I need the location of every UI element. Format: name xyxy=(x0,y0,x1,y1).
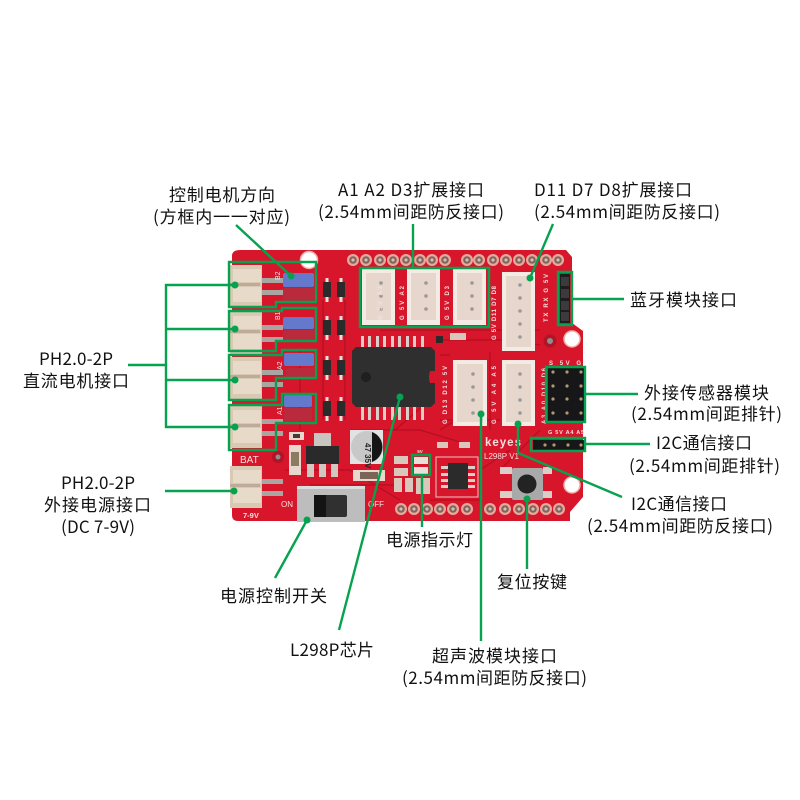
label: power connector: PH2.0-2P xyxy=(61,469,135,494)
board silk text: G 5V A4 A5 xyxy=(548,430,584,436)
bottom pin pads xyxy=(395,503,565,515)
I2C connector leader xyxy=(518,424,622,497)
motor bracket xyxy=(128,285,235,427)
label: bluetooth: 蓝牙模块接口 xyxy=(630,286,737,311)
circuit board xyxy=(230,250,584,522)
label: motor connector: 直流电机接口 xyxy=(23,367,129,392)
board silk text: G 5V A1 xyxy=(378,285,384,320)
label: power connector: 外接电源接口 xyxy=(44,491,151,516)
green callout lines xyxy=(128,224,650,641)
board silk text: G 5V A4 A5 xyxy=(492,365,498,424)
D11 D7 D8 leader xyxy=(530,224,553,278)
board silk text: G 5V D3 xyxy=(445,285,451,320)
direction leader xyxy=(236,225,291,276)
board silk text: 7-9V xyxy=(243,511,259,520)
label: motor direction xyxy=(153,181,290,228)
board silk text: B2 xyxy=(275,271,282,280)
label: motor direction: (方框内一一对应) xyxy=(153,203,290,228)
label: power switch: 电源控制开关 xyxy=(220,582,327,607)
small SMD parts xyxy=(289,333,470,494)
power LEDs xyxy=(414,457,428,474)
diodes xyxy=(323,278,345,421)
sensor box and leader xyxy=(546,367,638,422)
board silk text: keyes xyxy=(485,437,522,449)
regulator xyxy=(306,433,339,477)
label: motor direction: 控制电机方向 xyxy=(169,181,275,206)
label: I2C connector: I2C通信接口 xyxy=(631,490,727,515)
lower white connectors xyxy=(453,360,535,426)
callout labels xyxy=(23,176,782,689)
label: D11 D7 D8: (2.54mm间距防反接口) xyxy=(534,198,720,223)
reset leader xyxy=(526,499,528,569)
board silk text: L298P V1 xyxy=(484,452,520,461)
reset button xyxy=(500,467,552,500)
capacitor: 47 35V xyxy=(363,443,372,469)
label: ultrasonic: 超声波模块接口 xyxy=(432,642,557,667)
board silk text: OFF xyxy=(368,500,384,509)
white connector row xyxy=(362,269,486,325)
label: I2C connector: (2.54mm间距防反接口) xyxy=(587,512,773,537)
8-pin IC xyxy=(436,457,478,497)
motor connectors xyxy=(230,265,283,508)
label: reset: 复位按键 xyxy=(497,568,567,593)
board traces xyxy=(285,300,540,500)
label: A1 A2 D3: (2.54mm间距防反接口) xyxy=(318,198,504,223)
top pin pads xyxy=(347,254,564,266)
board silk text: G D13 D12 5V xyxy=(443,366,449,424)
label: I2C connector xyxy=(587,490,773,537)
board silk text: BAT xyxy=(240,455,259,466)
label: A1 A2 D3 xyxy=(318,176,504,223)
blue and red jumpers xyxy=(283,273,314,421)
board silk text: G 5V D11 D7 D8 xyxy=(492,285,498,340)
label: D11 D7 D8: D11 D7 D8扩展接口 xyxy=(534,176,692,201)
label: A1 A2 D3: A1 A2 D3扩展接口 xyxy=(338,176,484,201)
power input leader xyxy=(165,490,234,492)
label: motor connector xyxy=(23,345,129,392)
D11 D7 D8 connector xyxy=(502,272,535,351)
power LED box and leader xyxy=(412,455,430,527)
label: ultrasonic: (2.54mm间距防反接口) xyxy=(402,664,587,689)
label: sensor module xyxy=(631,379,782,425)
motor jumper boxes xyxy=(229,262,316,450)
label: ultrasonic xyxy=(402,642,587,689)
board silk text: S 5V G xyxy=(549,361,581,367)
mounting holes xyxy=(300,252,580,493)
label: I2C header xyxy=(629,429,780,477)
label: I2C header: I2C通信接口 xyxy=(656,429,752,454)
board silk text: A2 xyxy=(277,361,284,370)
I2C header xyxy=(533,440,584,450)
L298P chip xyxy=(352,336,435,420)
label: D11 D7 D8 xyxy=(534,176,720,223)
label: L298P: L298P芯片 xyxy=(290,636,374,661)
I2C box and leader xyxy=(531,438,650,451)
board outline xyxy=(232,250,583,521)
leader dots xyxy=(230,272,534,524)
label: power connector xyxy=(44,469,151,538)
label: I2C header: (2.54mm间距排针) xyxy=(629,452,780,477)
label: sensor module: 外接传感器模块 xyxy=(644,379,769,404)
capacitor xyxy=(350,430,383,469)
board silk text: 5V xyxy=(417,449,423,454)
grey vias xyxy=(272,334,556,463)
power switch xyxy=(297,486,365,522)
bluetooth header xyxy=(560,274,570,323)
board silk text: G 5V A2 xyxy=(400,285,406,320)
A1 A2 D3 leader and box xyxy=(360,224,489,327)
board silk text: B1 xyxy=(275,311,282,320)
board silk text xyxy=(240,271,584,520)
bluetooth box and leader xyxy=(558,272,624,325)
label: power connector: (DC 7-9V) xyxy=(61,513,135,538)
sensor header xyxy=(548,368,584,422)
board silk text: A1 xyxy=(277,406,284,415)
label: motor connector: PH2.0-2P xyxy=(39,345,113,370)
label: power LED: 电源指示灯 xyxy=(386,526,473,551)
label: sensor module: (2.54mm间距排针) xyxy=(631,400,782,425)
ultrasonic leader xyxy=(480,414,482,641)
board silk text: TX RX G 5V xyxy=(544,274,550,322)
L298P leader xyxy=(339,397,400,630)
board silk text: ON xyxy=(281,500,293,509)
board silk text: A3 A0 D10 D6 xyxy=(542,367,548,424)
switch leader xyxy=(275,520,307,578)
